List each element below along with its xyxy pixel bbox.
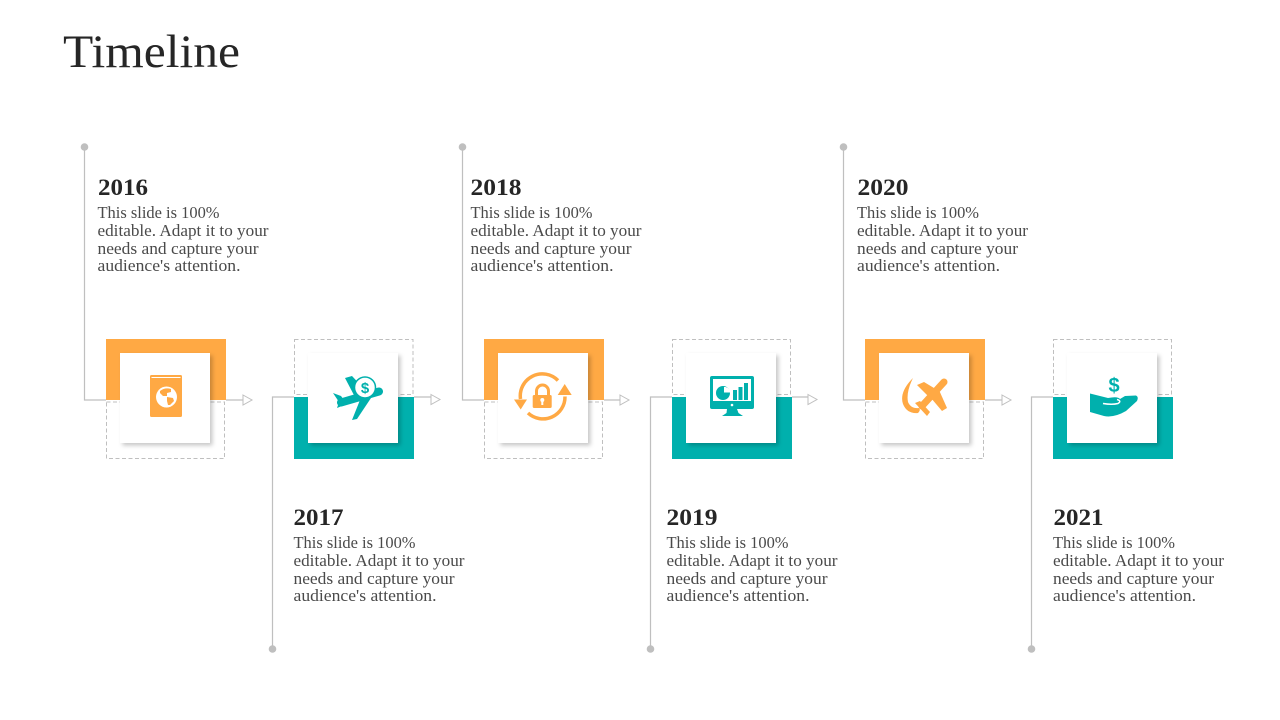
box 2019	[672, 340, 792, 459]
connector line 2019	[647, 397, 808, 653]
text 2017: audience's attention.	[294, 586, 436, 605]
text 2016: audience's attention.	[98, 256, 240, 275]
text 2021: This slide is 100%	[1053, 533, 1175, 552]
text 2019: needs and capture your	[666, 569, 828, 588]
year 2020: 2020	[858, 175, 908, 200]
text 2020: audience's attention.	[857, 256, 1000, 275]
text 2018: audience's attention.	[470, 256, 614, 275]
text 2017	[294, 533, 465, 605]
text 2021: audience's attention.	[1053, 586, 1196, 605]
box 2018	[484, 339, 604, 458]
box 2021	[1053, 340, 1173, 459]
step 2019	[647, 340, 838, 653]
connector line 2020	[840, 143, 1002, 400]
icon: plane with dollar	[333, 376, 379, 420]
arrow 2016	[243, 395, 252, 405]
year 2021: 2021	[1054, 505, 1104, 530]
text 2017: needs and capture your	[294, 569, 455, 588]
step 2018	[459, 143, 642, 458]
year 2016: 2016	[98, 175, 148, 200]
icon: hand holding dollar: $	[1108, 375, 1120, 397]
text 2019: This slide is 100%	[666, 533, 789, 552]
icon: padlock with cycle arrows	[514, 374, 572, 419]
arrow 2018	[620, 395, 629, 405]
text 2019: editable. Adapt it to your	[666, 551, 838, 570]
text 2018: editable. Adapt it to your	[470, 221, 642, 240]
text 2019	[666, 533, 838, 605]
step 2016	[81, 143, 269, 458]
year 2018: 2018	[470, 175, 522, 200]
text 2019: audience's attention.	[666, 586, 810, 605]
text 2018: needs and capture your	[470, 239, 632, 258]
text 2021: editable. Adapt it to your	[1053, 551, 1225, 570]
icon: plane with dollar: $	[361, 380, 370, 397]
title: Timeline	[63, 26, 240, 78]
text 2016	[98, 203, 269, 275]
icon: plane with swoosh	[902, 378, 947, 416]
box 2016	[106, 339, 226, 458]
text 2016: editable. Adapt it to your	[98, 221, 269, 240]
text 2018	[470, 203, 642, 275]
text 2020: This slide is 100%	[857, 203, 979, 222]
step 2021	[1028, 340, 1225, 653]
text 2020: needs and capture your	[857, 239, 1019, 258]
box 2020	[865, 339, 985, 458]
box 2017	[294, 340, 414, 459]
text 2016: This slide is 100%	[98, 203, 220, 222]
arrow 2017	[431, 394, 440, 404]
step 2017	[269, 340, 465, 653]
text 2020: editable. Adapt it to your	[857, 221, 1029, 240]
icon: hand holding dollar	[1090, 375, 1138, 416]
connector line 2016	[81, 143, 243, 400]
text 2017: This slide is 100%	[294, 533, 416, 552]
step 2020	[840, 143, 1029, 458]
connector line 2017	[269, 397, 431, 653]
text 2018: This slide is 100%	[470, 203, 593, 222]
text 2017: editable. Adapt it to your	[294, 551, 465, 570]
text 2021	[1053, 533, 1225, 605]
text 2020	[857, 203, 1029, 275]
icon: globe book	[150, 375, 182, 417]
icon: monitor with charts	[710, 376, 754, 416]
arrow 2020	[1002, 395, 1011, 405]
year 2017: 2017	[294, 505, 344, 530]
connector line 2018	[459, 143, 620, 400]
arrow 2019	[808, 394, 817, 404]
text 2016: needs and capture your	[98, 239, 259, 258]
text 2021: needs and capture your	[1053, 569, 1215, 588]
year 2019: 2019	[666, 505, 718, 530]
connector line 2021	[1028, 397, 1053, 653]
